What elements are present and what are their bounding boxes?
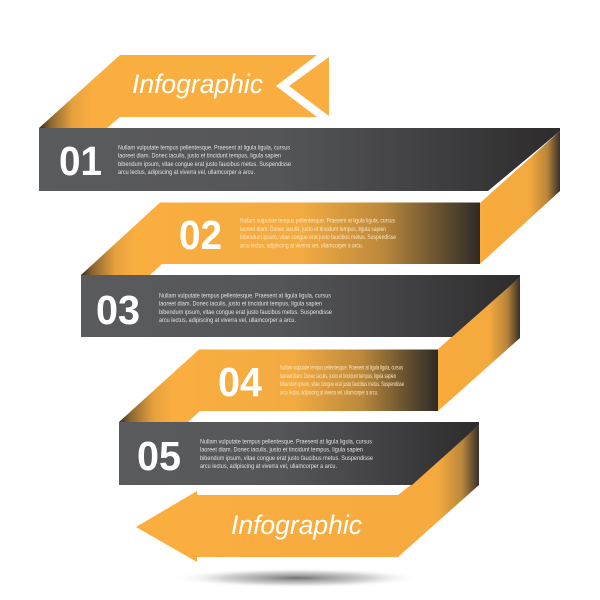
number 01: 01: [59, 138, 102, 184]
fold connecting band 01 to band 02: [480, 131, 560, 264]
band 02 text: arcu lectus, adipiscing at viverra vel, ullamcorper a arcu.: [240, 242, 363, 249]
number 03: 03: [96, 287, 140, 333]
band 03: [81, 275, 520, 337]
band 05 text: arcu lectus, adipiscing at viverra vel, ullamcorper a arcu.: [200, 463, 337, 470]
band 01 text: Nullam vulputate tempus pellentesque. Praesent at ligula ligula, cursus: [118, 144, 290, 152]
band 01 text: [118, 144, 291, 176]
band 05 text: bibendum ipsum, vitae congue erat justo faucibus metus. Suspendisse: [200, 455, 373, 462]
band 01 text: arcu lectus, adipiscing at viverra vel, ullamcorper a arcu.: [118, 169, 255, 176]
banner swallowtail tip: [289, 57, 329, 116]
band 01: [39, 128, 560, 191]
band 01 background: [39, 128, 560, 191]
arrow body with fold: [136, 425, 479, 562]
band 04 text: arcu lectus, adipiscing at viverra vel, ullamcorper a arcu.: [280, 390, 378, 396]
number 04: 04: [218, 359, 262, 405]
band 02 text: [240, 218, 396, 249]
fold connecting band 03 to band 04: [438, 277, 520, 411]
band 02 text: bibendum ipsum, vitae congue erat justo faucibus metus. Suspendisse: [240, 234, 396, 241]
number 02: 02: [179, 212, 222, 258]
top ribbon banner: [39, 55, 329, 128]
band 04 text: laoreet diam. Donec iaculis, justo et tincidunt tempus, ligula sapien: [280, 373, 396, 380]
bottom arrow banner: [136, 425, 479, 562]
band 02 text: laoreet diam. Donec iaculis, justo et tincidunt tempus, ligula sapien: [240, 226, 386, 233]
band 01 text: laoreet diam. Donec iaculis, justo et tincidunt tempus, ligula sapien: [118, 153, 281, 160]
band 02 background with fold: [81, 202, 480, 275]
band 04 text: [280, 365, 404, 396]
banner title: Infographic: [132, 69, 263, 99]
band 03 text: Nullam vulputate tempus pellentesque. Praesent at ligula ligula, cursus: [159, 292, 331, 300]
band 05 text: [200, 438, 373, 470]
number 05: 05: [137, 433, 181, 479]
band 03 text: arcu lectus, adipiscing at viverra vel, ullamcorper a arcu.: [159, 317, 296, 324]
band 04 text: Nullam vulputate tempus pellentesque. Praesent at ligula ligula, cursus: [280, 365, 403, 372]
arrow title: Infographic: [231, 510, 362, 540]
drop shadow under arrow: [172, 568, 422, 588]
band 02 text: Nullam vulputate tempus pellentesque. Praesent at ligula ligula, cursus: [240, 218, 395, 224]
band 05: [119, 422, 479, 485]
band 04: [119, 350, 438, 422]
band 05 text: Nullam vulputate tempus pellentesque. Praesent at ligula ligula, cursus: [200, 438, 372, 446]
band 05 background: [119, 422, 479, 485]
band 04 text: bibendum ipsum, vitae congue erat justo faucibus metus. Suspendisse: [280, 381, 404, 388]
banner body with fold: [39, 55, 317, 128]
band 04 background with fold: [119, 350, 438, 422]
band 03 background: [81, 275, 520, 337]
band 03 text: bibendum ipsum, vitae congue erat justo faucibus metus. Suspendisse: [159, 309, 332, 316]
band 01 text: bibendum ipsum, vitae congue erat justo faucibus metus. Suspendisse: [118, 161, 291, 168]
band 03 text: [159, 292, 332, 324]
band 02: [81, 202, 480, 275]
band 03 text: laoreet diam. Donec iaculis, justo et tincidunt tempus, ligula sapien: [159, 301, 322, 308]
band 05 text: laoreet diam. Donec iaculis, justo et tincidunt tempus, ligula sapien: [200, 447, 363, 454]
